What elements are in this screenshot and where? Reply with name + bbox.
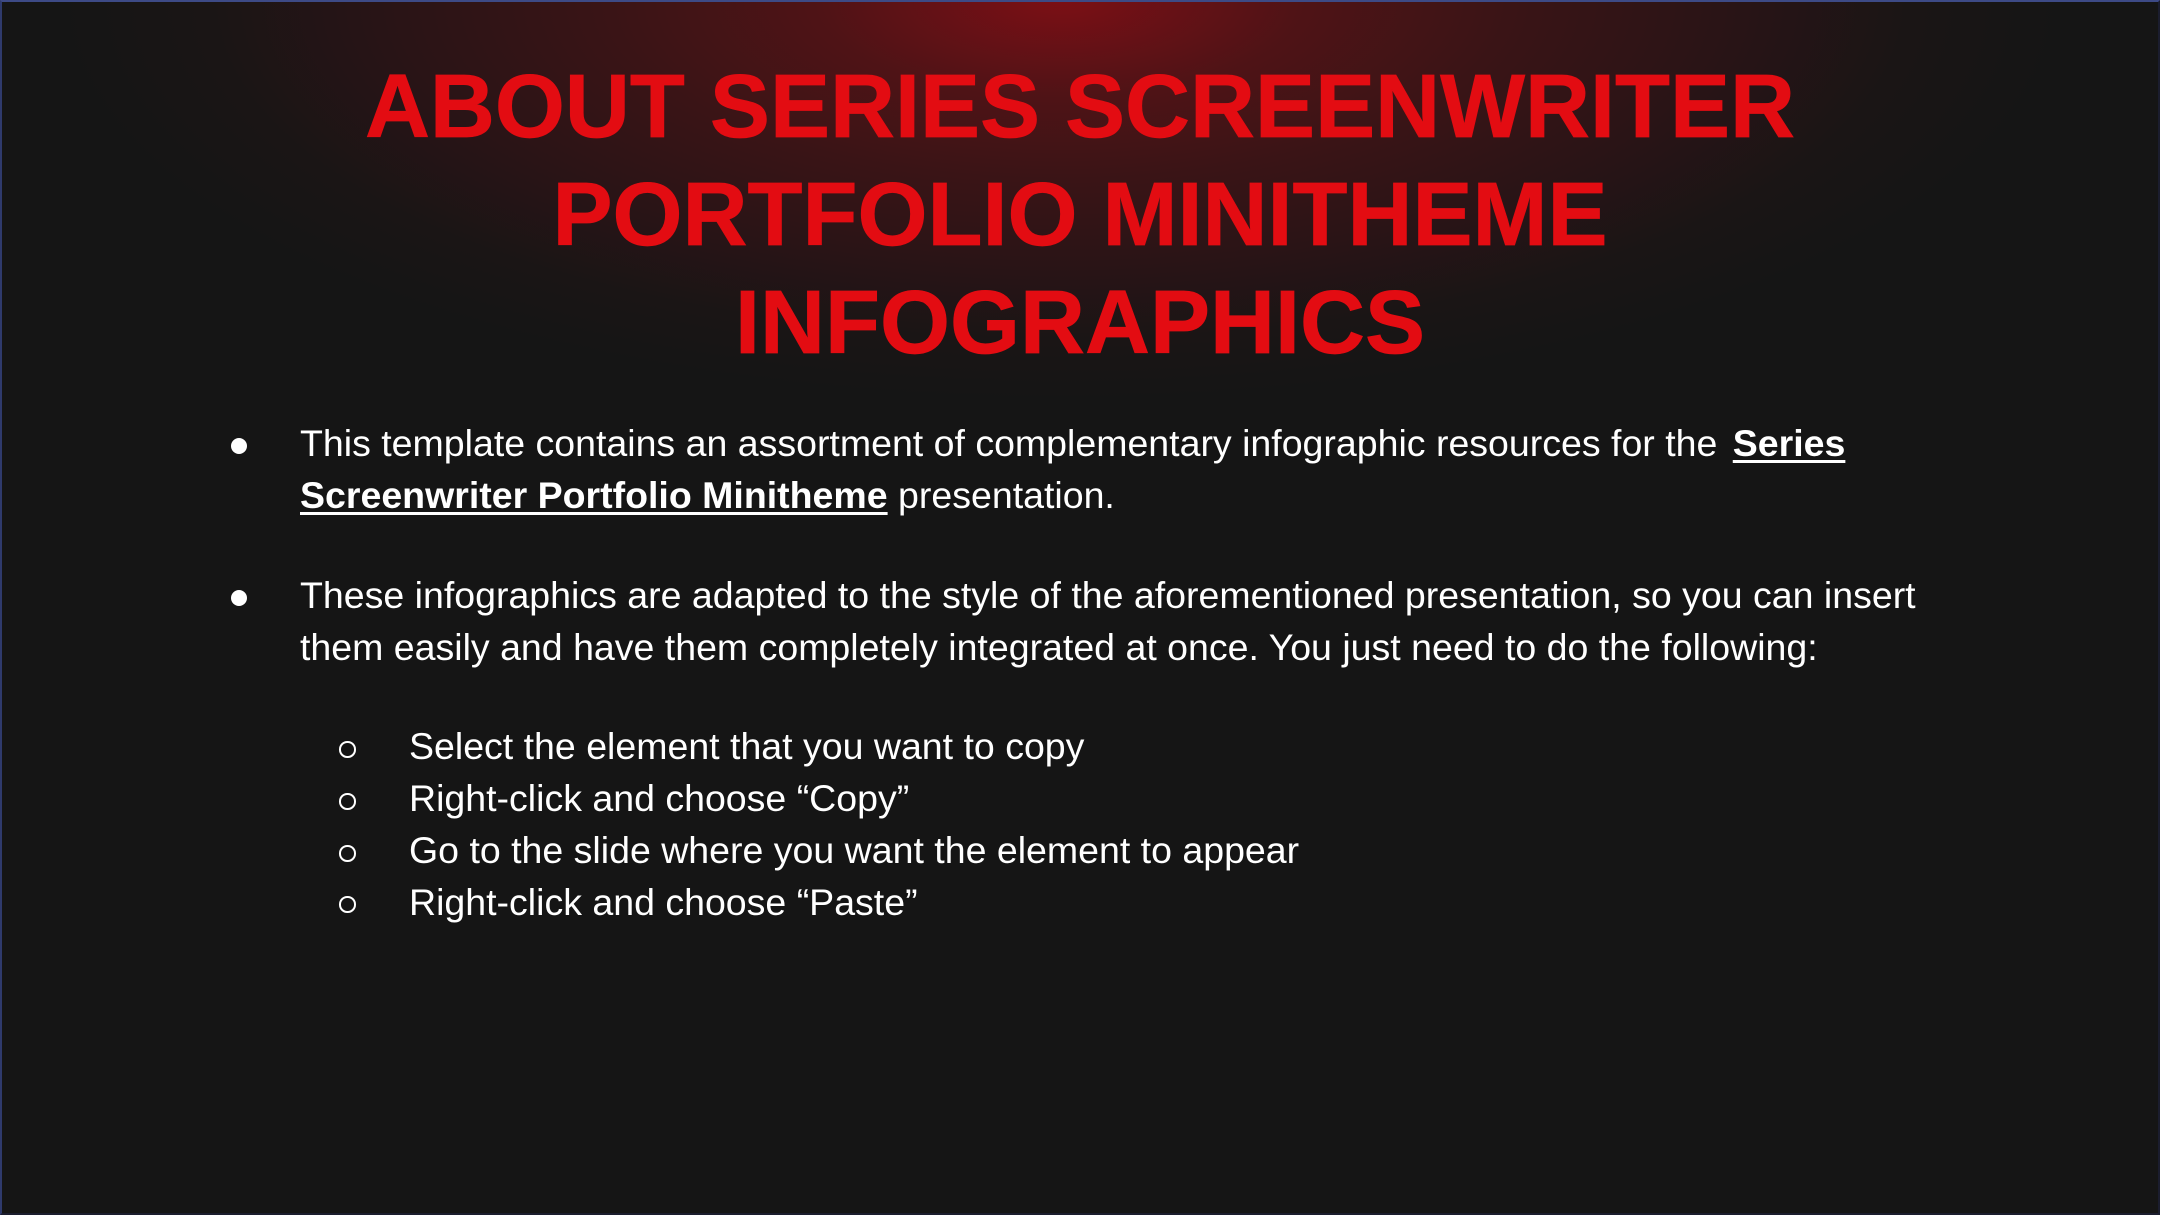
bullet point: template intro: This template contains an assortment of complementary infographic resources for the Series: [300, 422, 1845, 464]
title: ABOUT SERIES SCREENWRITER: [365, 57, 1795, 157]
title: INFOGRAPHICS: [735, 273, 1425, 373]
bullet point: template intro: Screenwriter Portfolio Minitheme presentation.: [300, 474, 1115, 516]
bullet point: usage intro: These infographics are adapted to the style of the aforementioned presentation, so you can insert: [300, 574, 1916, 616]
bullet point: template intro: [231, 422, 1846, 516]
bullet point: usage intro: [231, 574, 1916, 668]
title: [365, 57, 1795, 373]
sub-list: copy and paste steps: [339, 725, 1299, 923]
sub-list: copy and paste steps: Select the element that you want to copy: [409, 725, 1084, 767]
title: PORTFOLIO MINITHEME: [553, 165, 1607, 265]
sub-list: copy and paste steps: Right-click and choose “Paste”: [409, 881, 918, 923]
bullet point: usage intro: them easily and have them completely integrated at once. You just need to do the following:: [300, 626, 1818, 668]
sub-list: copy and paste steps: Right-click and choose “Copy”: [409, 777, 909, 819]
sub-list: copy and paste steps: Go to the slide where you want the element to appear: [409, 829, 1299, 871]
